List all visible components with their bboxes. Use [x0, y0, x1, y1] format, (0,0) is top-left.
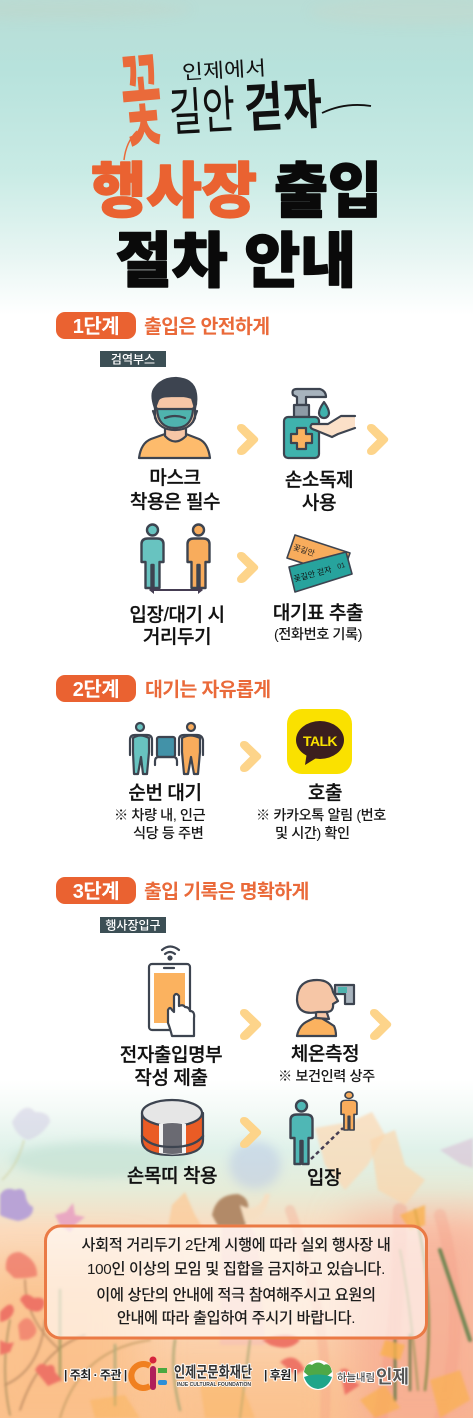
bottom streaks: [5, 1210, 470, 1418]
step 2 heading: 2단계: [73, 678, 119, 701]
icon: phone: [149, 946, 194, 1036]
title: 행사장: [91, 158, 257, 225]
label: ticket: (전화번호 기록): [274, 627, 362, 643]
step 3 heading: 출입 기록은 명확하게: [144, 881, 309, 903]
notice box: 사회적 거리두기 2단계 시행에 따라 실외 행사장 내: [81, 1237, 391, 1254]
notice box: 이에 상단의 안내에 적극 참여해주시고 요원의: [96, 1287, 376, 1304]
calligraphy logo: [117, 44, 371, 161]
icon: temperature check: [297, 980, 354, 1036]
icon: masked person: [139, 378, 210, 458]
chevron: [370, 1009, 391, 1040]
label: distancing: [129, 604, 225, 648]
footer: organizer: | 주최 · 주관 |: [64, 1368, 127, 1382]
label: call: ※ 카카오톡 알림 (번호: [256, 808, 386, 824]
fairy: [212, 1194, 248, 1226]
label: mask: 마스크: [149, 467, 201, 489]
label: e-register: 전자출입명부: [120, 1044, 222, 1066]
footer: organizer: 인제: [376, 1367, 409, 1387]
label: waiting: 식당 등 주변: [133, 826, 203, 842]
label: waiting: ※ 차량 내, 인근: [114, 808, 206, 824]
label: ticket: 대기표 추출: [273, 602, 363, 624]
icon: Inje county logo: [303, 1360, 333, 1390]
label: e-register: 작성 제출: [134, 1067, 208, 1089]
label: mask: [130, 467, 220, 513]
tag: quarantine booth: 검역부스: [111, 352, 155, 366]
step 2 heading: 대기는 자유롭게: [145, 679, 270, 701]
chevron: [367, 424, 388, 455]
faded upper flowers: [2, 1108, 473, 1180]
footer: organizer: 하늘내림: [337, 1371, 375, 1384]
icon: tickets: [287, 535, 352, 592]
label: enter: 입장: [307, 1167, 341, 1189]
footer: organizer: 인제군문화재단: [174, 1364, 252, 1381]
label: temperature: [278, 1043, 375, 1085]
chevron: [240, 1009, 261, 1040]
label: call: [256, 782, 386, 842]
label: distancing: 입장/대기 시: [129, 604, 225, 626]
footer: organizer: INJE CULTURAL FOUNDATION: [177, 1382, 251, 1388]
notice box: 100인 이상의 모임 및 집합을 금지하고 있습니다.: [87, 1261, 385, 1278]
tag: quarantine booth: [100, 351, 166, 367]
icon: KakaoTalk: TALK: [303, 733, 337, 749]
footer: organizer: | 후원 |: [264, 1367, 297, 1382]
icon: tickets: 꽃길안: [292, 542, 317, 558]
calligraphy logo: 꽃: [117, 44, 167, 161]
step 1 heading: 출입은 안전하게: [144, 316, 269, 338]
label: distancing: 거리두기: [143, 626, 211, 648]
label: mask: 착용은 필수: [130, 491, 220, 513]
label: e-register: [120, 1044, 222, 1089]
red poppies: [0, 1252, 360, 1395]
tag: entrance: 행사장입구: [105, 918, 161, 932]
notice box: [46, 1226, 426, 1338]
chevron: [237, 424, 258, 455]
label: sanitizer: 사용: [302, 492, 336, 514]
step 3 heading: [56, 877, 309, 904]
calligraphy logo: 길안: [168, 82, 237, 143]
footer: organizer: [64, 1356, 409, 1390]
icon: wristband: [142, 1100, 203, 1155]
label: call: 호출: [308, 782, 342, 804]
chevron: [240, 741, 261, 772]
notice box: 안내에 따라 출입하여 주시기 바랍니다.: [117, 1310, 355, 1327]
step 1 heading: [56, 312, 269, 339]
title: 출입: [274, 158, 382, 225]
chevron: [240, 1117, 261, 1148]
icon: foundation logo: [131, 1356, 167, 1390]
icon: waiting chairs: [130, 723, 203, 774]
label: temperature: 체온측정: [291, 1043, 359, 1065]
step 1 heading: 1단계: [73, 315, 119, 338]
label: ticket: [273, 602, 363, 643]
icon: tickets: 꽃길안 걷자: [292, 564, 333, 584]
icon: distancing people: [142, 524, 210, 594]
label: temperature: ※ 보건인력 상주: [278, 1069, 375, 1085]
icon: KakaoTalk: [287, 709, 352, 774]
label: sanitizer: [285, 469, 353, 514]
title: 절차 안내: [116, 228, 356, 295]
label: call: 및 시간) 확인: [275, 826, 350, 842]
chevron: [237, 552, 258, 583]
icon: hand sanitizer: [284, 389, 355, 458]
step 3 heading: 3단계: [73, 880, 119, 903]
calligraphy logo: 인제에서: [181, 57, 267, 84]
calligraphy logo: 걷자: [243, 75, 324, 139]
icon: tickets: 01: [337, 562, 346, 571]
step 2 heading: [56, 675, 270, 702]
icon: entering people: [290, 1092, 357, 1164]
label: waiting: 순번 대기: [128, 782, 202, 804]
label: wristband: 손목띠 착용: [127, 1165, 217, 1187]
label: sanitizer: 손소독제: [285, 469, 353, 491]
label: waiting: [114, 782, 206, 842]
title: [91, 158, 382, 295]
